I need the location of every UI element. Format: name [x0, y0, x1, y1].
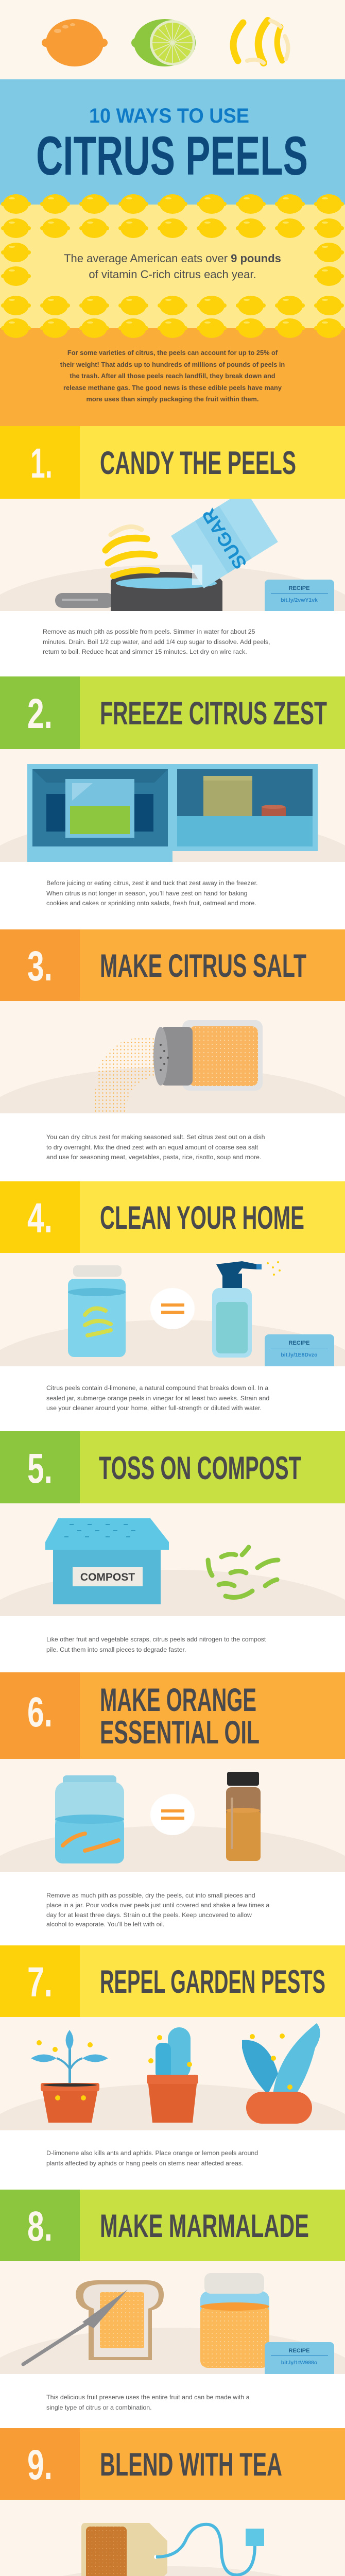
recipe callout	[265, 580, 334, 616]
text 2: When citrus is not longer in season, you’ll have zest on hand for baking	[46, 889, 248, 896]
illustration 9: tea bag	[0, 2500, 345, 2576]
jar	[68, 1265, 126, 1357]
text 2: Before juicing or eating citrus, zest it and tuck that zest away in the freezer.	[46, 879, 257, 887]
text 6: Remove as much pith as possible, dry the peels, cut into small pieces and	[46, 1892, 255, 1899]
number 1: 1.	[30, 440, 53, 487]
compost bin: COMPOST	[80, 1571, 135, 1583]
tea bag	[81, 2523, 167, 2576]
recipe callout	[265, 1334, 334, 1370]
freezer left	[27, 764, 173, 862]
text 1: return to boil. Reduce heat and simmer 15 minutes. Let dry on wire rack.	[43, 648, 247, 655]
illustration 2: freezer	[0, 749, 345, 862]
knife	[23, 2290, 128, 2364]
peel scraps	[208, 1547, 278, 1597]
illustration 8: toast and marmalade jar	[0, 2261, 345, 2374]
header 6	[0, 1672, 345, 1759]
number 8: 8.	[27, 2203, 53, 2250]
jar with peels	[55, 1775, 124, 1863]
text 1: Remove as much pith as possible from peels. Simmer in water for about 25	[43, 628, 255, 635]
text 7: plants affected by aphids or hang peels on stems near affected areas.	[46, 2160, 244, 2167]
text 6: day for at least three days. Strain out the peels. Keep uncovered to allow	[46, 1911, 252, 1919]
stat text	[64, 252, 281, 281]
intro orange band	[0, 328, 345, 426]
recipe callout	[265, 2342, 334, 2378]
header 5	[0, 1431, 345, 1503]
recipe callout: bit.ly/2vwY1vk	[281, 597, 318, 603]
title 6: MAKE ORANGE	[100, 1682, 256, 1718]
stat text: The average American eats over 9 pounds	[64, 252, 281, 265]
intro text: release methane gas. The good news is these edible peels have many	[63, 383, 282, 392]
text 6: alcohol to evaporate. You’ll be left with oil.	[46, 1921, 164, 1928]
toast	[76, 2280, 164, 2360]
number 4: 4.	[27, 1195, 53, 1242]
number 5: 5.	[27, 1445, 53, 1492]
title block	[0, 79, 345, 205]
pan	[55, 572, 222, 611]
text 7	[46, 2149, 258, 2167]
intro text	[60, 349, 285, 403]
title 6	[100, 1682, 260, 1751]
text 6	[46, 1892, 270, 1928]
tea string and tag	[156, 2524, 264, 2575]
intro text: more uses than simply packaging the fruit within them.	[87, 395, 258, 403]
intro text: For some varieties of citrus, the peels can account for up to 25% of	[67, 349, 278, 357]
number 2: 2.	[27, 690, 53, 737]
recipe callout: RECIPE	[289, 1340, 309, 1346]
text 1	[43, 628, 270, 655]
lemon pattern stat panel	[0, 205, 345, 328]
equals	[150, 1794, 195, 1835]
illustration 3: salt shaker	[0, 1001, 345, 1113]
icon: lime	[131, 19, 196, 66]
header 8	[0, 2190, 345, 2261]
recipe callout: RECIPE	[289, 585, 309, 591]
text 8	[46, 2394, 250, 2411]
number 9: 9.	[27, 2442, 53, 2488]
title line 1: 10 WAYS TO USE	[89, 105, 249, 127]
text 2	[46, 879, 257, 907]
intro text: the trash. After all those peels reach landfill, they break down and	[70, 372, 275, 380]
stat text: of vitamin C-rich citrus each year.	[89, 268, 256, 281]
plant 2 cactus	[147, 2027, 198, 2123]
intro text: their weight! That adds up to hundreds of millions of pounds of peels in	[60, 361, 285, 368]
header 1	[0, 426, 345, 499]
sugar bag	[169, 487, 280, 590]
lemon peel	[106, 527, 157, 576]
illustration 4: vinegar jar and spray	[0, 1253, 345, 1366]
text 5: pile. Cut them into small pieces to degrade faster.	[46, 1646, 186, 1653]
top fruit banner	[0, 0, 345, 79]
illustration 6: jar and oil bottle	[0, 1759, 345, 1872]
header 9	[0, 2428, 345, 2500]
text 3: and use for seasoning meat, vegetables, pasta, rice, risotto, soup and more.	[46, 1154, 261, 1161]
oil bottle	[226, 1772, 261, 1861]
header 4	[0, 1181, 345, 1253]
recipe callout: bit.ly/1E8Dvzo	[281, 1352, 318, 1358]
text 8: This delicious fruit preserve uses the entire fruit and can be made with a	[46, 2394, 250, 2401]
text 8: single type of citrus or a combination.	[46, 2404, 152, 2411]
text 2: cookies and cakes or sprinkling onto salads, fresh fruit, oatmeal and more.	[46, 900, 256, 907]
number 6: 6.	[27, 1689, 53, 1736]
text 3	[46, 1133, 265, 1161]
text 4	[46, 1384, 269, 1412]
illustration 5: compost bin	[0, 1503, 345, 1616]
text 4: use your cleaner around your home, either full-strength or diluted with water.	[46, 1404, 262, 1412]
text 4: sealed jar, submerge orange peels in vinegar for at least two weeks. Strain and	[46, 1394, 269, 1401]
illustration 1: candied peels	[0, 499, 345, 611]
number 7: 7.	[27, 1959, 53, 2006]
icon: lemon peel spiral	[233, 21, 288, 63]
plant 1	[31, 2030, 108, 2123]
title 6: ESSENTIAL OIL	[100, 1715, 260, 1751]
text 5	[46, 1636, 266, 1653]
number 3: 3.	[27, 943, 53, 990]
compost bin	[45, 1518, 169, 1604]
header 7	[0, 1945, 345, 2017]
text 4: Citrus peels contain d-limonene, a natural compound that breaks down oil. In a	[46, 1384, 268, 1392]
text 5: Like other fruit and vegetable scraps, citrus peels add nitrogen to the compost	[46, 1636, 266, 1643]
plant 3	[242, 2023, 320, 2124]
sugar bag: SUGAR	[198, 505, 251, 573]
text 7: D-limonene also kills ants and aphids. Place orange or lemon peels around	[46, 2149, 258, 2157]
header 2	[0, 676, 345, 749]
lemon row overlapping band edge	[1, 318, 344, 338]
icon: orange	[42, 19, 108, 66]
text 3: to dry overnight. Mix the dried zest with an equal amount of coarse sea salt	[46, 1144, 258, 1151]
illustration 7: potted plants	[0, 2017, 345, 2130]
header 3	[0, 929, 345, 1001]
marmalade jar	[200, 2273, 269, 2368]
recipe callout: RECIPE	[289, 2348, 309, 2354]
spray bottle	[212, 1261, 281, 1358]
text 3: You can dry citrus zest for making seasoned salt. Set citrus zest out on a dish	[46, 1133, 265, 1141]
text 6: place in a jar. Pour vodka over peels just until covered and shake a few times a	[46, 1902, 269, 1909]
sugar sprinkle	[192, 565, 202, 585]
recipe callout: bit.ly/1tW988o	[281, 2360, 317, 2366]
equals	[150, 1288, 195, 1329]
text 1: minutes. Drain. Boil 1/2 cup water, and add 1/4 cup sugar to dissolve. Add peels,	[43, 638, 270, 645]
shaker	[153, 1020, 263, 1091]
freezer right	[173, 764, 318, 851]
salt spray	[93, 1038, 154, 1113]
